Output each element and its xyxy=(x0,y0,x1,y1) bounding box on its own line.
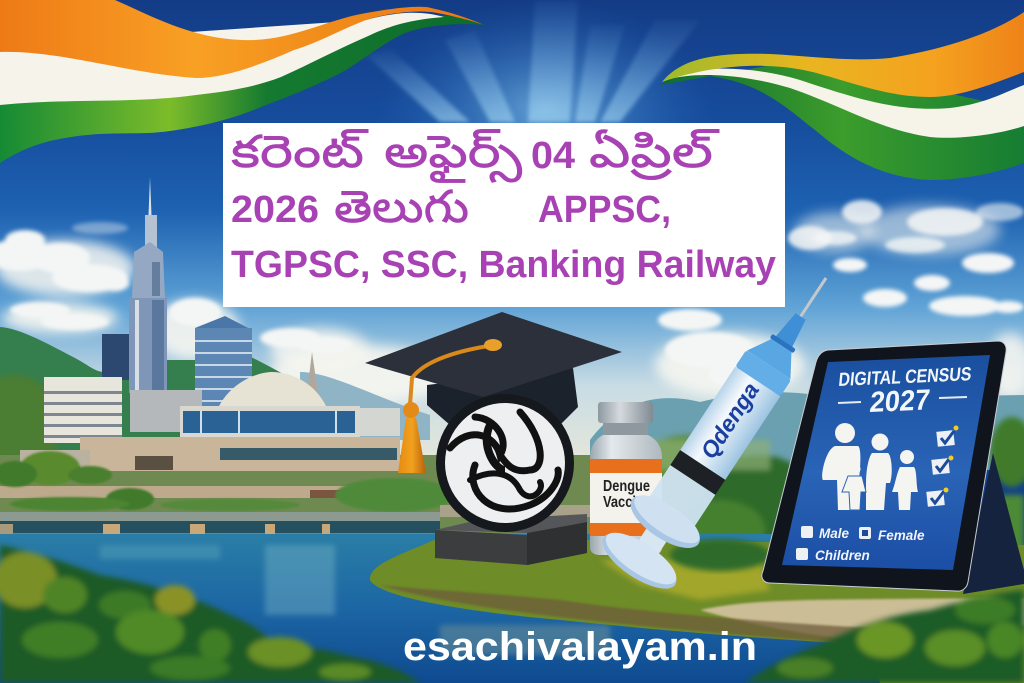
checklist boxes xyxy=(926,426,958,507)
family figures xyxy=(822,423,918,510)
option female xyxy=(859,527,925,543)
water reflections xyxy=(100,545,610,655)
pedestal xyxy=(435,514,587,565)
website label: esachivalayam.in xyxy=(403,625,757,669)
tassel button xyxy=(484,339,502,351)
option male: Male xyxy=(819,526,850,541)
title word: affairs: అఫైర్స్ xyxy=(384,126,523,183)
title line 3: TGPSC, SSC, Banking Railway xyxy=(231,244,776,286)
distant trees xyxy=(600,417,1024,565)
dome xyxy=(218,372,327,408)
campus ground xyxy=(0,455,640,540)
trees by campus xyxy=(0,451,455,512)
mountains xyxy=(0,327,1024,475)
title exam APPSC: APPSC, xyxy=(538,189,671,231)
title word: current: కరెంట్ xyxy=(231,126,369,177)
cap skull xyxy=(427,368,578,425)
left block xyxy=(44,377,122,443)
option male xyxy=(801,526,850,541)
census year: 2027 xyxy=(868,384,931,419)
river bank island xyxy=(370,539,1024,683)
river xyxy=(0,534,860,683)
right flag xyxy=(660,12,1024,180)
tower xyxy=(129,177,167,393)
title year: 2026 xyxy=(231,189,319,231)
low block xyxy=(130,390,202,432)
campus buildings xyxy=(0,177,420,498)
clouds xyxy=(0,200,1024,405)
tablet body xyxy=(762,341,1006,591)
left flag xyxy=(0,0,484,163)
sky background xyxy=(0,0,1024,470)
podium xyxy=(20,437,400,471)
small spire xyxy=(307,352,318,393)
title panel xyxy=(223,123,785,307)
Qdenga syringe xyxy=(594,254,862,599)
left foreground foliage xyxy=(0,545,420,683)
far buildings xyxy=(360,408,400,436)
rotunda xyxy=(180,406,360,438)
vial label: Dengue xyxy=(603,478,650,495)
title date: 04 xyxy=(531,135,575,177)
vial label line 2: Vaccine xyxy=(603,494,651,511)
right foreground foliage xyxy=(745,590,1024,683)
syringe brand: Qdenga xyxy=(695,377,764,463)
graduation cap emblem on pedestal xyxy=(365,312,622,565)
option children: Children xyxy=(815,548,870,563)
bridge xyxy=(0,505,590,544)
road terrace xyxy=(0,486,420,498)
sun glow xyxy=(375,0,715,220)
tablet stand xyxy=(963,453,1024,594)
dark block xyxy=(102,334,129,380)
sun rays xyxy=(366,0,700,122)
tassel cord xyxy=(410,345,495,405)
title word: telugu: తెలుగు xyxy=(334,181,469,232)
dengue vaccine vial xyxy=(590,402,662,555)
option female: Female xyxy=(878,528,925,543)
census heading: DIGITAL CENSUS xyxy=(838,364,972,391)
cap board xyxy=(365,312,622,397)
tassel xyxy=(398,402,426,473)
year rules xyxy=(838,397,967,403)
right tower xyxy=(195,316,252,408)
title word: april: ఏప్రిల్ xyxy=(589,126,720,180)
tablet screen xyxy=(782,355,990,570)
emblem disc xyxy=(436,394,574,532)
census tablet xyxy=(762,341,1024,594)
